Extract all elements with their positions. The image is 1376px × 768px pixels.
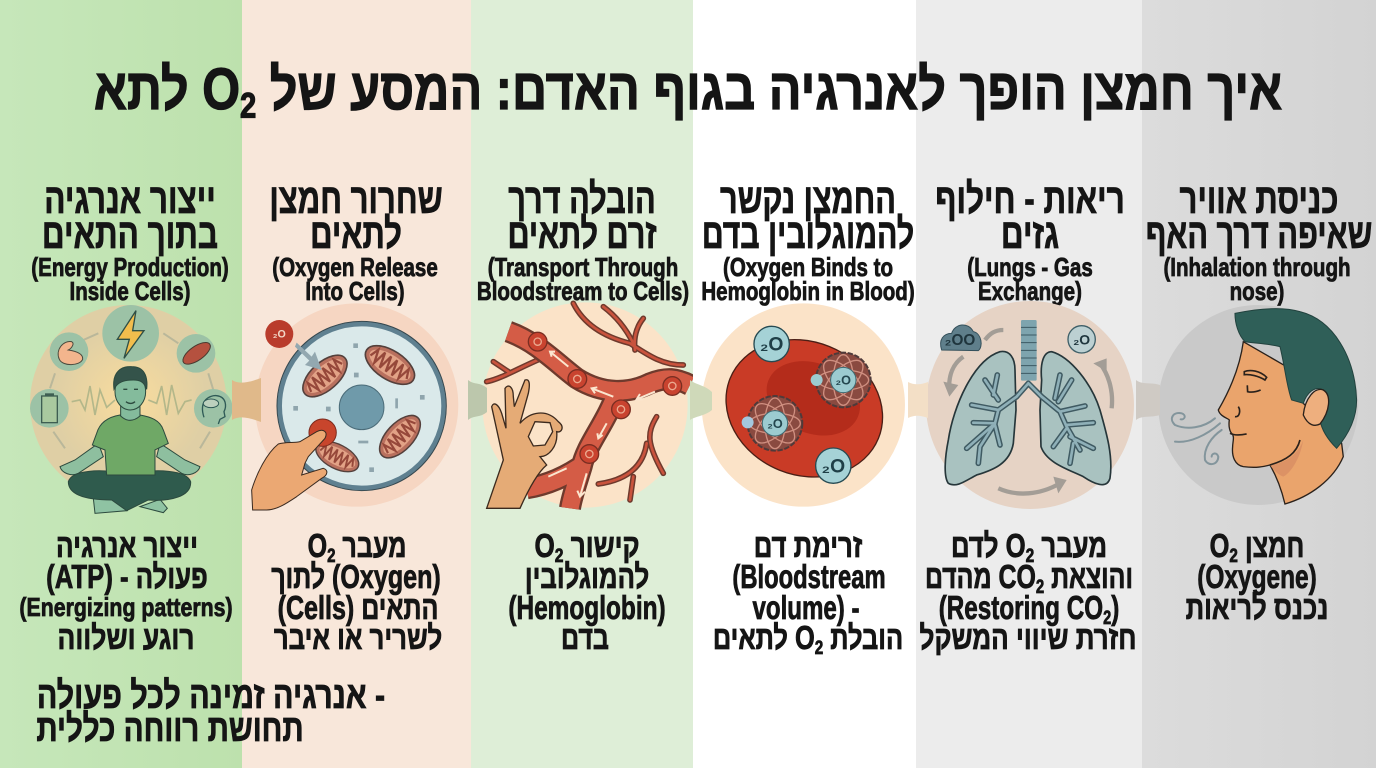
panel: lungs xyxy=(916,0,1142,768)
heading: bloodstream transport xyxy=(507,175,657,257)
red blood cells xyxy=(528,332,682,463)
heading: bloodstream transport: זרם לתאים xyxy=(507,210,657,257)
heading: oxygen release xyxy=(269,175,443,257)
CO2 cloud xyxy=(941,325,981,351)
icon: battery xyxy=(30,389,69,428)
body text: inhalation: (Oxygene) xyxy=(1197,558,1317,595)
subtitle: hemoglobin binding xyxy=(701,252,915,306)
body text: lungs: והוצאת CO2 מהדם xyxy=(925,558,1133,598)
subtitle: energy production: Inside Cells) xyxy=(70,276,190,306)
panel: hemoglobin binding xyxy=(693,0,916,768)
panel: energy production xyxy=(0,0,242,768)
body text: hemoglobin binding xyxy=(713,527,903,659)
panel: bloodstream transport xyxy=(471,0,693,768)
main vessels xyxy=(508,332,690,508)
oxygen bubble xyxy=(816,448,851,483)
thin branches xyxy=(487,303,683,500)
icon: head with brain xyxy=(194,389,233,428)
heading: lungs xyxy=(935,175,1125,257)
trachea xyxy=(1021,320,1037,381)
body text: bloodstream transport: בדם xyxy=(561,619,609,656)
body text: hemoglobin binding: זרימת דם xyxy=(754,527,862,564)
subtitle: energy production: (Energy Production) xyxy=(31,252,229,282)
body text: bloodstream transport: (Hemoglobin) xyxy=(508,589,666,626)
hemoglobin molecule: ₂O xyxy=(767,417,783,431)
body text: inhalation xyxy=(1186,527,1328,626)
panel: oxygen release xyxy=(242,0,471,768)
heading: oxygen release: לתאים xyxy=(310,210,402,257)
body text: lungs: (Restoring CO2) xyxy=(939,589,1119,629)
body text: hemoglobin binding: הובלת O2 לתאים xyxy=(713,619,903,659)
pulse lines xyxy=(72,385,192,415)
subtitle: inhalation: nose) xyxy=(1230,276,1284,306)
oxygen bubble: ₂O xyxy=(1073,331,1090,347)
heading: energy production: ייצור אנרגיה xyxy=(44,175,216,222)
illustration: blood vessels and hand xyxy=(482,300,693,510)
heading: energy production: בתוך התאים xyxy=(42,210,218,257)
subtitle: bloodstream transport: (Transport Through xyxy=(488,252,678,282)
subtitle: energy production xyxy=(31,252,229,306)
red blood cell xyxy=(705,317,903,500)
body text: oxygen release: לשריר או איבר xyxy=(274,619,442,656)
body text: inhalation: נכנס לריאות xyxy=(1186,589,1328,626)
body text: lungs: מעבר O2 לדם xyxy=(951,527,1107,567)
body text: inhalation: חמצן O2 xyxy=(1210,527,1304,567)
heading: hemoglobin binding: החמצן נקשר xyxy=(720,175,896,222)
heading: lungs: גזים xyxy=(1001,210,1059,257)
body text: energy production: ייצור אנרגיה xyxy=(56,527,198,564)
heading: inhalation xyxy=(1146,175,1372,257)
circular arrows xyxy=(949,330,1112,494)
subtitle: bloodstream transport: Bloodstream to Cells) xyxy=(477,276,689,306)
illustration: lungs xyxy=(926,301,1134,509)
nucleus xyxy=(339,385,384,430)
oxygen molecule xyxy=(265,320,293,348)
icon: flexed arm xyxy=(50,332,88,371)
heading: inhalation: כניסת אוויר xyxy=(1180,175,1338,222)
person xyxy=(60,367,200,513)
body text: bloodstream transport xyxy=(508,527,666,656)
body text: hemoglobin binding: (Bloodstream xyxy=(732,558,886,595)
heading: hemoglobin binding: להמוגלובין בדם xyxy=(702,210,914,257)
face xyxy=(1218,342,1343,504)
icon: pointing hand xyxy=(252,430,327,510)
subtitle: oxygen release: (Oxygen Release xyxy=(272,252,438,282)
hemoglobin molecule xyxy=(811,353,871,407)
CO2 cloud: ₂OO xyxy=(945,332,975,349)
illustration: cell with mitochondria xyxy=(251,304,458,510)
body text: energy production: רוגע ושלווה xyxy=(57,619,195,656)
air wisps xyxy=(1172,413,1222,464)
footer note: - אנרגיה זמינה לכל פעולה xyxy=(37,675,385,717)
illustration: red blood cell with hemoglobin xyxy=(702,303,905,507)
flow arrows xyxy=(548,352,655,497)
oxygen bubble: ₂O xyxy=(821,456,845,477)
subtitle: lungs xyxy=(967,252,1093,306)
hemoglobin molecule xyxy=(742,396,802,451)
body text: bloodstream transport: להמוגלובין xyxy=(525,558,649,595)
body text: hemoglobin binding: volume) - xyxy=(752,589,860,626)
subtitle: lungs: Exchange) xyxy=(978,276,1082,306)
bronchial tree xyxy=(967,375,1093,463)
subtitle: inhalation xyxy=(1163,252,1351,306)
ear xyxy=(1303,389,1329,425)
subtitle: inhalation: (Inhalation through xyxy=(1163,252,1351,282)
subtitle: bloodstream transport xyxy=(477,252,689,306)
icon: OK hand xyxy=(487,380,562,508)
heading: lungs: ריאות - חילוף xyxy=(935,175,1125,222)
subtitle: hemoglobin binding: (Oxygen Binds to xyxy=(723,252,893,282)
body text: lungs xyxy=(920,527,1136,656)
hair xyxy=(1235,309,1357,448)
oxygen molecule: ₂O xyxy=(273,329,286,341)
left lung xyxy=(945,351,1016,485)
oxygen bubble xyxy=(1068,326,1095,353)
icon: energy bolt xyxy=(102,305,159,362)
footer note xyxy=(36,675,385,750)
oxygen bubble xyxy=(754,326,789,362)
body text: energy production: (Energizing patterns) xyxy=(19,592,233,622)
illustration: face inhaling through nose xyxy=(1159,305,1358,505)
eye, brow, mouth xyxy=(1230,371,1300,465)
subtitle: lungs: (Lungs - Gas xyxy=(967,252,1093,282)
body text: bloodstream transport: קישור O2 xyxy=(534,527,640,567)
subtitle: hemoglobin binding: Hemoglobin in Blood) xyxy=(701,276,915,306)
heading: bloodstream transport: הובלה דרך xyxy=(508,175,656,222)
arrow into cell xyxy=(295,343,322,370)
body text: oxygen release: התאים (Cells) xyxy=(278,589,438,626)
heading: energy production xyxy=(42,175,218,257)
right lung xyxy=(1040,352,1111,485)
heading: inhalation: שאיפה דרך האף xyxy=(1146,210,1372,257)
heading: oxygen release: שחרור חמצן xyxy=(269,175,443,222)
body text: energy production xyxy=(19,527,233,656)
subtitle: oxygen release: Into Cells) xyxy=(305,276,405,306)
hemoglobin molecule: ₂O xyxy=(836,374,851,388)
arrow connectors between stages xyxy=(232,378,1160,422)
icon: muscle xyxy=(177,334,215,373)
body text: oxygen release: מעבר O2 xyxy=(308,527,406,567)
illustration: meditating person with energy icons xyxy=(30,305,232,514)
body text: oxygen release xyxy=(271,527,442,656)
oxygen bubble: ₂O xyxy=(760,335,783,356)
panel: inhalation xyxy=(1142,0,1376,768)
title: איך חמצן הופך לאנרגיה בגוף האדם: המסע של O2 לתא xyxy=(94,57,1282,126)
footer note: תחושת רווחה כללית xyxy=(36,708,304,750)
body text: lungs: חזרת שיווי המשקל xyxy=(920,619,1136,656)
subtitle: oxygen release xyxy=(272,252,438,306)
heading: hemoglobin binding xyxy=(702,175,914,257)
body text: energy production: פעולה - (ATP) xyxy=(46,558,208,595)
dashed links xyxy=(50,333,213,448)
body text: oxygen release: (Oxygen) לתוך xyxy=(271,558,441,595)
